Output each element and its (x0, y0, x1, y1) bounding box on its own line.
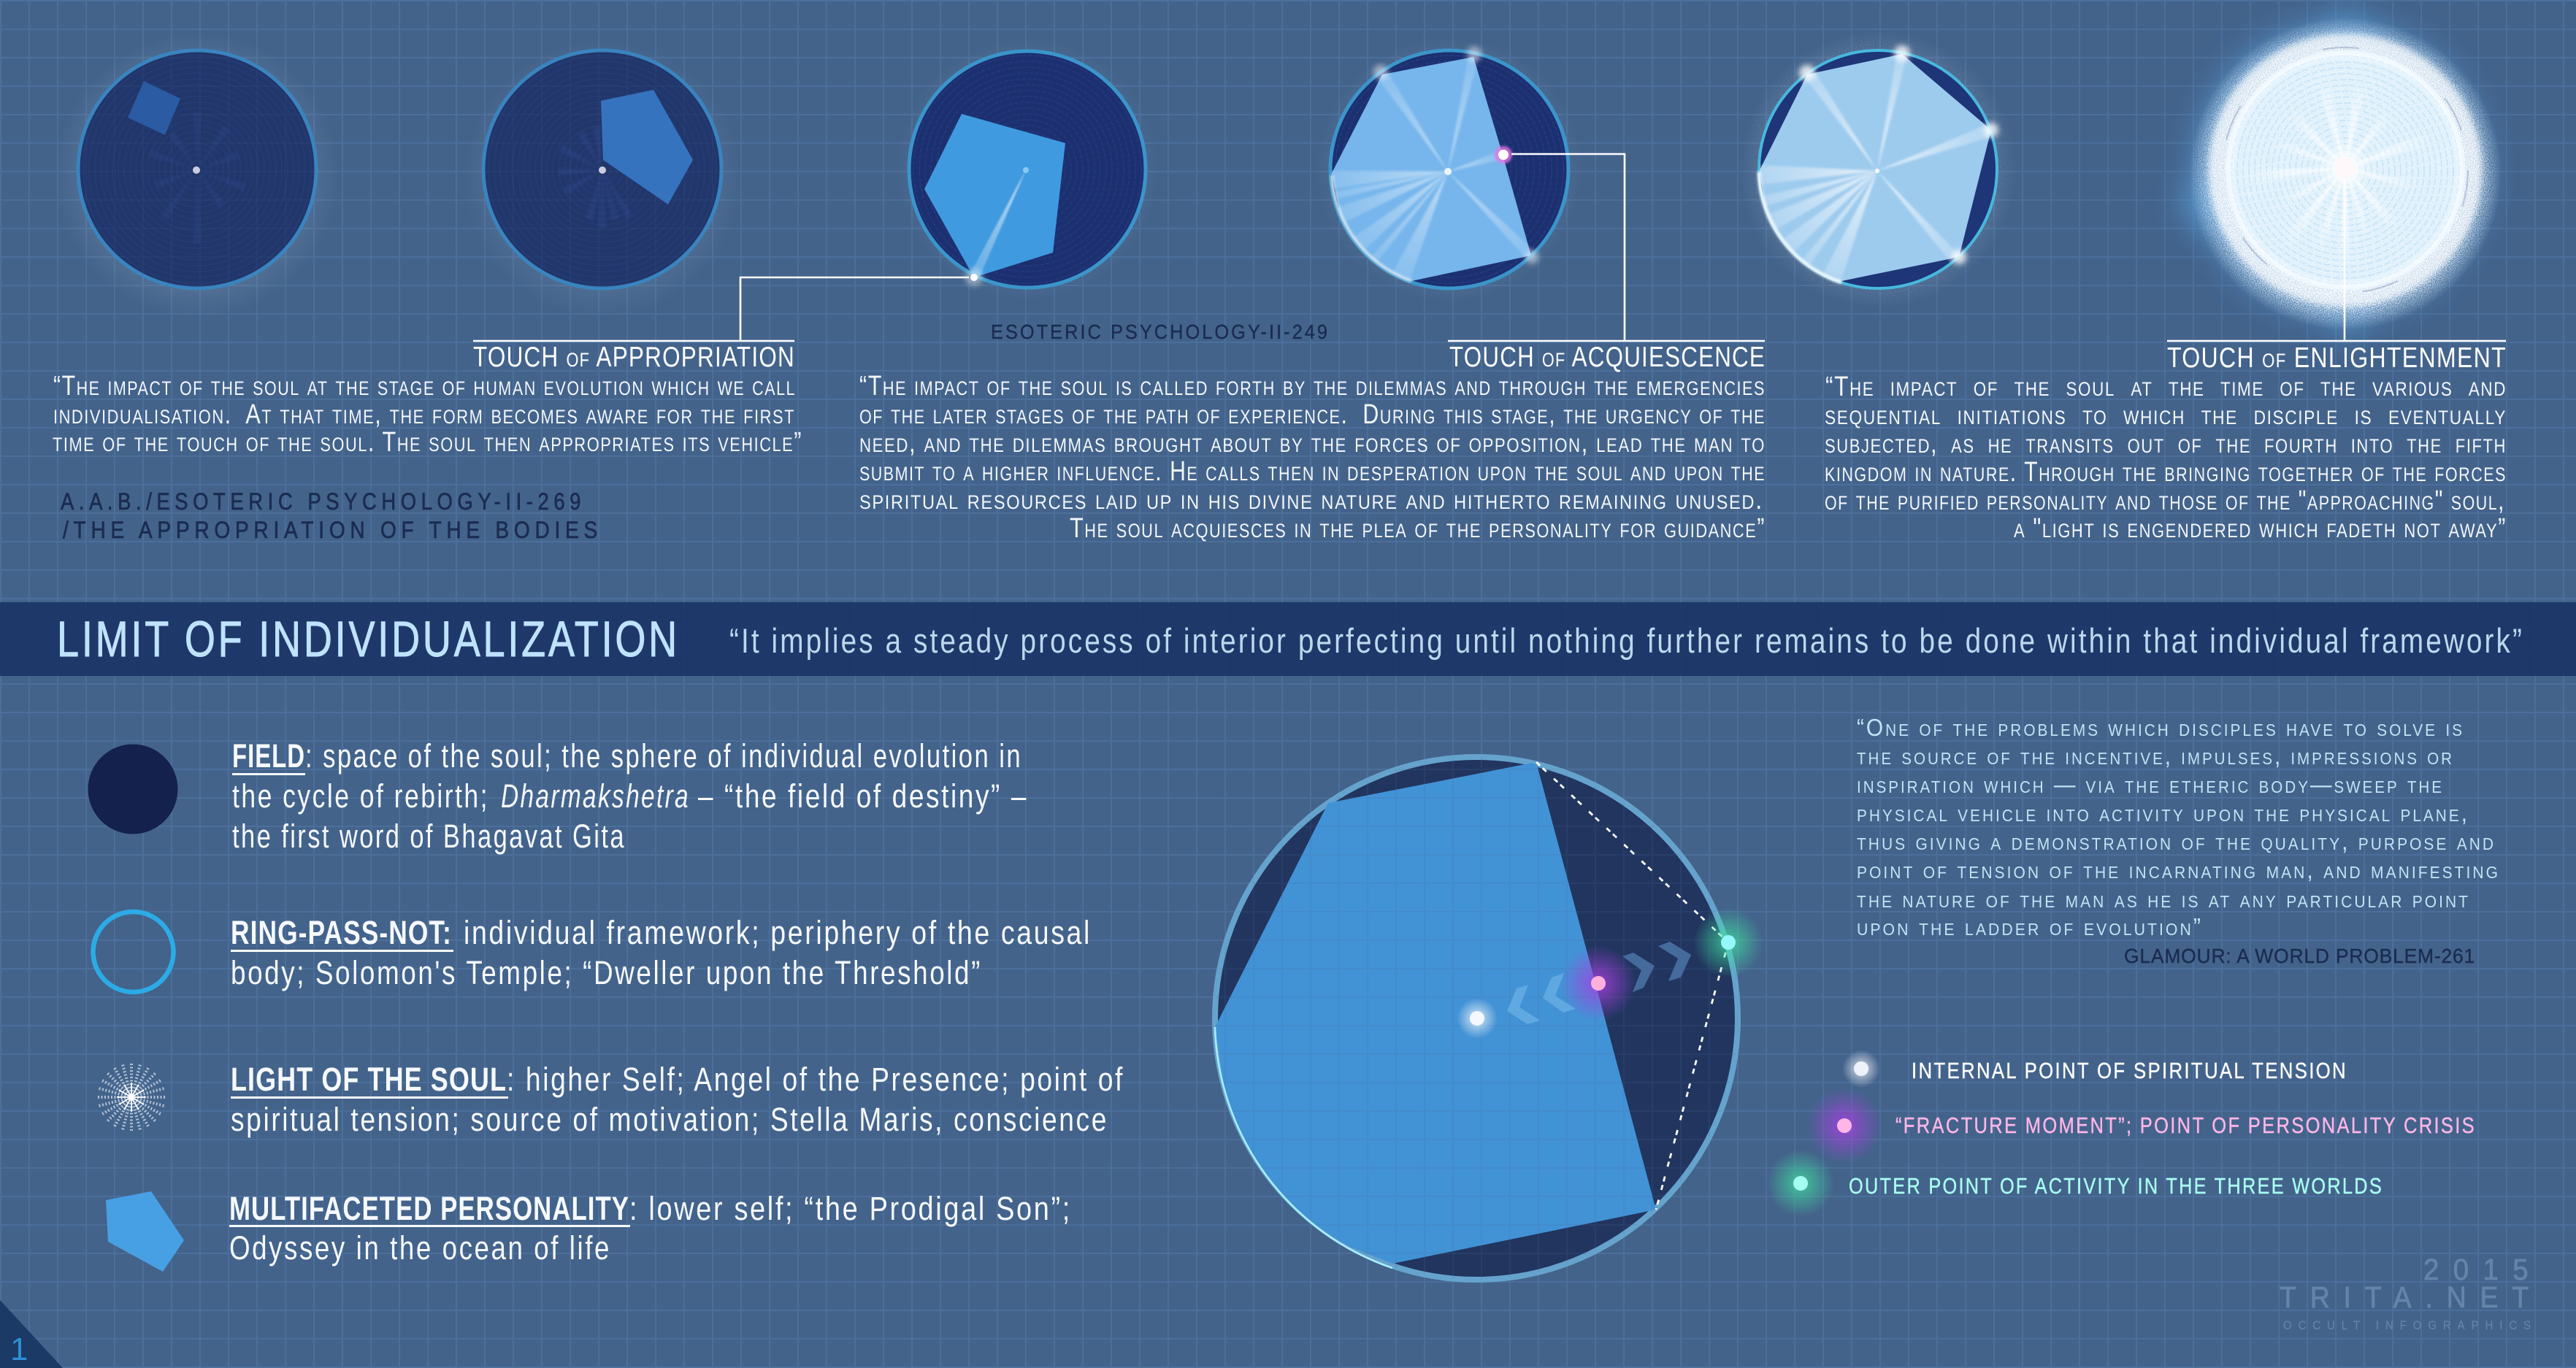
stage circle 3: touch of appropriation (896, 38, 1159, 301)
point: internal spiritual tension (1457, 998, 1498, 1039)
purple glow at fracture point (1560, 945, 1636, 1021)
light of the soul description: spiritual tension; source of motivation; Stella Maris, conscience (231, 1101, 1108, 1138)
quote: glamour: the nature of the man as he is at any particular point (1857, 885, 2470, 912)
quote: appropriation: time of the touch of the soul. The soul then appropriates its vehicle” (53, 427, 802, 458)
stage circle 4: touch of acquiescence (1327, 43, 1571, 291)
field description (232, 737, 1028, 855)
personality polygon (1215, 762, 1656, 1264)
quote: acquiescence: submit to a higher influence. He calls then in desperation upon the soul and upon the (859, 456, 1766, 487)
quote: acquiescence: need, and the dilemmas brought about by the forces of opposition, lead the man to (859, 428, 1766, 458)
credit: trita.net: 2015 (2423, 1253, 2542, 1286)
multifaceted personality description: MULTIFACETED PERSONALITY (229, 1190, 629, 1227)
reference: appropriation of the bodies (61, 488, 602, 543)
light of the soul description (231, 1061, 1124, 1138)
point: outer activity (1693, 907, 1763, 977)
stage circle 1: first touch (72, 48, 323, 301)
faint grid through disc (1212, 752, 1745, 1285)
key: internal point of spiritual tension (1842, 1050, 2347, 1088)
stage circle 5: personality almost filling the field (1739, 31, 2017, 308)
panel: touch of appropriation (53, 342, 802, 543)
icon: ring (93, 912, 174, 992)
field disc with ring (1215, 757, 1738, 1280)
icon: light rays (98, 1064, 165, 1131)
heading: touch of enlightenment: TOUCH of ENLIGHTENMENT (2167, 342, 2507, 374)
multifaceted personality description: Odyssey in the ocean of life (229, 1229, 611, 1267)
quote: acquiescence: spiritual resources laid up in his divine nature and hitherto remaining unused. (859, 485, 1763, 515)
quote: acquiescence: “The impact of the soul is called forth by the dilemmas and through the emergencies (859, 371, 1766, 401)
key: outer point of activity: OUTER POINT OF ACTIVITY IN THE THREE WORLDS (1849, 1173, 2383, 1199)
quote: glamour: physical vehicle into activity upon the physical plane, (1857, 799, 2469, 826)
quote: enlightenment (1825, 372, 2507, 544)
light of the soul description: LIGHT OF THE SOUL (231, 1061, 507, 1098)
legend: multifaceted personality (106, 1190, 1072, 1272)
quote: appropriation: “The impact of the soul at the stage of human evolution which we call (53, 371, 796, 401)
page number corner: 1 (10, 1332, 28, 1367)
ring-pass-not description: RING-PASS-NOT: (231, 914, 452, 951)
heading: touch of acquiescence: TOUCH of ACQUIESCENCE (1449, 342, 1766, 373)
reference: esoteric psychology 249: ESOTERIC PSYCHOLOGY-II-249 (991, 320, 1330, 343)
quote: glamour: upon the ladder of evolution” (1857, 913, 2203, 940)
field description: Dharmakshetra (501, 777, 690, 815)
chevrons toward outer point (1622, 942, 1691, 992)
dashed path to outer point (1536, 762, 1728, 1210)
key: internal point of spiritual tension: INTERNAL POINT OF SPIRITUAL TENSION (1912, 1058, 2347, 1083)
icon: personality polygon (106, 1191, 184, 1272)
quote: glamour: point of tension of the incarnating man, and manifesting (1857, 856, 2500, 883)
legend: light of the soul (98, 1061, 1124, 1138)
quote: acquiescence: The soul acquiesces in the plea of the personality for guidance” (1070, 513, 1766, 544)
key: outer point of activity (1767, 1150, 2383, 1217)
field description: the cycle of rebirth; (232, 777, 489, 815)
reference: appropriation of the bodies: /THE APPROPRIATION OF THE BODIES (63, 517, 602, 543)
chevrons toward inner point (1507, 973, 1576, 1024)
arc of contact (1215, 1027, 1392, 1268)
field description: FIELD (232, 737, 305, 775)
light of the soul description: : higher Self; Angel of the Presence; point of (507, 1061, 1124, 1098)
quote: glamour: inspiration which — via the etheric body—sweep the (1857, 771, 2444, 798)
reference: glamour a world problem: GLAMOUR: A WORLD PROBLEM-261 (2124, 945, 2475, 967)
stage circle 6: touch of enlightenment, radiant (2182, 7, 2502, 340)
banner: limit of individualization (0, 602, 2576, 676)
panel: touch of acquiescence (859, 342, 1766, 544)
quote: acquiescence (859, 371, 1766, 544)
panel: touch of enlightenment (1825, 342, 2507, 544)
multifaceted personality description: : lower self; “the Prodigal Son”; (629, 1190, 1072, 1227)
field description: : space of the soul; the sphere of individual evolution in (305, 737, 1022, 775)
credit: trita.net: OCCULT INFOGRAPHICS (2283, 1318, 2537, 1332)
banner title: LIMIT OF INDIVIDUALIZATION (57, 611, 680, 667)
heading: touch of appropriation: TOUCH of APPROPRIATION (473, 342, 795, 373)
connector lines and title rules (473, 154, 2506, 341)
quote: acquiescence: of the later stages of the path of experience. During this stage, the urgency of the (859, 399, 1766, 430)
ring-pass-not description: body; Solomon's Temple; “Dweller upon the Threshold” (231, 954, 982, 991)
quote: glamour: thus giving a demonstration of the quality, purpose and (1857, 828, 2496, 855)
quote: glamour: “One of the problems which disciples have to solve is (1857, 714, 2464, 741)
ring-pass-not description (231, 914, 1092, 991)
quote: glamour: the source of the incentive, impulses, impressions or (1857, 742, 2454, 769)
page number corner (0, 1300, 63, 1368)
quote: appropriation: individualisation. At that time, the form becomes aware for the first (53, 399, 795, 430)
point: fracture moment (1591, 976, 1606, 991)
field description: the first word of Bhagavat Gita (232, 818, 626, 855)
reference: appropriation of the bodies: A.A.B./ESOTERIC PSYCHOLOGY-II-269 (61, 488, 586, 515)
field description: – “the field of destiny” – (698, 777, 1028, 815)
credit: trita.net (2280, 1253, 2542, 1332)
credit: trita.net: TRITA.NET (2280, 1280, 2542, 1314)
legend: ring-pass-not (93, 912, 1092, 992)
quote: glamour (1857, 714, 2500, 940)
ring-pass-not description: individual framework; periphery of the causal (464, 914, 1092, 951)
key: fracture moment (1806, 1088, 2476, 1164)
stage circle 2: personality grows (482, 48, 723, 295)
quote: appropriation (53, 371, 802, 458)
multifaceted personality description (229, 1190, 1072, 1267)
legend: field (88, 737, 1028, 855)
icon: field disc (88, 745, 178, 834)
main diagram: personality in the ring-pass-not (1212, 752, 1763, 1285)
